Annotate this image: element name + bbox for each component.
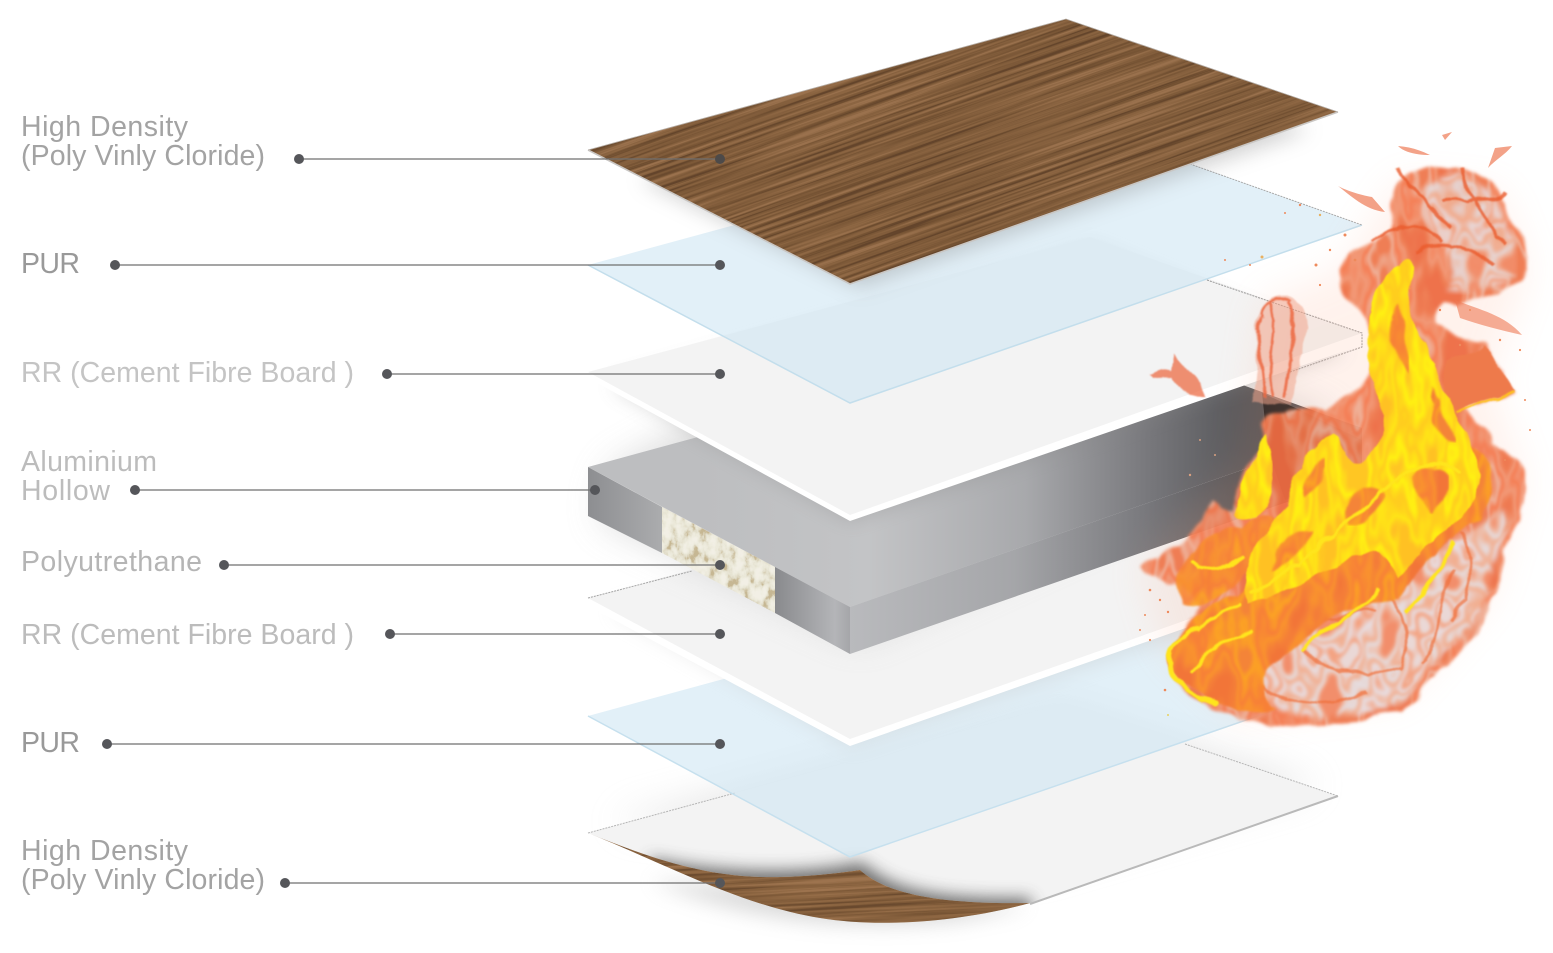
label: aluminium hollow bbox=[21, 446, 600, 507]
flame streak lines bbox=[1250, 165, 1505, 700]
polyurethane foam core bbox=[662, 507, 775, 613]
left flame wisp bbox=[1250, 293, 1306, 405]
pale ash body of flame bbox=[1225, 505, 1504, 715]
label: RR cement fibre board top: RR (Cement Fibre Board ) bbox=[21, 357, 354, 389]
aluminium hollow core block bbox=[588, 382, 1362, 654]
orange tongues inside the core bbox=[1270, 300, 1455, 570]
lower RR cement fibre board bbox=[588, 461, 1362, 746]
label: high density poly vinyl chloride bottom: (Poly Vinly Cloride) bbox=[21, 864, 265, 896]
label: PUR bottom: PUR bbox=[21, 727, 80, 759]
label: high density poly vinyl chloride top: High Density bbox=[21, 111, 189, 143]
label: high density poly vinyl chloride bottom: High Density bbox=[21, 835, 189, 867]
flame illustration bbox=[1139, 132, 1531, 724]
label: RR cement fibre board bottom bbox=[21, 619, 725, 651]
lower PUR sheet bbox=[588, 579, 1362, 857]
label: high density poly vinyl chloride bottom bbox=[21, 835, 725, 896]
detached flame wisps bbox=[1147, 352, 1203, 395]
label: PUR top bbox=[21, 248, 725, 280]
label: aluminium hollow: Aluminium bbox=[21, 446, 157, 478]
label: aluminium hollow: Hollow bbox=[21, 475, 110, 507]
label: polyurethane bbox=[21, 546, 725, 578]
label: PUR bottom bbox=[21, 727, 725, 759]
upper PUR sheet bbox=[588, 128, 1362, 403]
label: high density poly vinyl chloride top bbox=[21, 111, 725, 172]
bright flame ribbons bbox=[1167, 390, 1513, 702]
upper RR cement fibre board bbox=[588, 237, 1362, 521]
left yellow tongue bbox=[1232, 430, 1271, 518]
orange flame body bbox=[1167, 442, 1491, 709]
wood underside of curl bbox=[592, 834, 1030, 923]
central yellow flame core bbox=[1243, 260, 1477, 600]
label: polyurethane: Polyutrethane bbox=[21, 546, 202, 578]
bottom high density sheet with curled corner bbox=[588, 738, 1338, 932]
upper smoky red wisps bbox=[1140, 166, 1527, 724]
label: RR cement fibre board bottom: RR (Cement Fibre Board ) bbox=[21, 619, 354, 651]
top high density wood sheet bbox=[588, 18, 1338, 294]
label: high density poly vinyl chloride top: (Poly Vinly Cloride) bbox=[21, 140, 265, 172]
label: PUR top: PUR bbox=[21, 248, 80, 280]
right flame lobe bbox=[1441, 342, 1515, 410]
label: RR cement fibre board top bbox=[21, 357, 725, 389]
spark particles bbox=[1139, 204, 1531, 716]
